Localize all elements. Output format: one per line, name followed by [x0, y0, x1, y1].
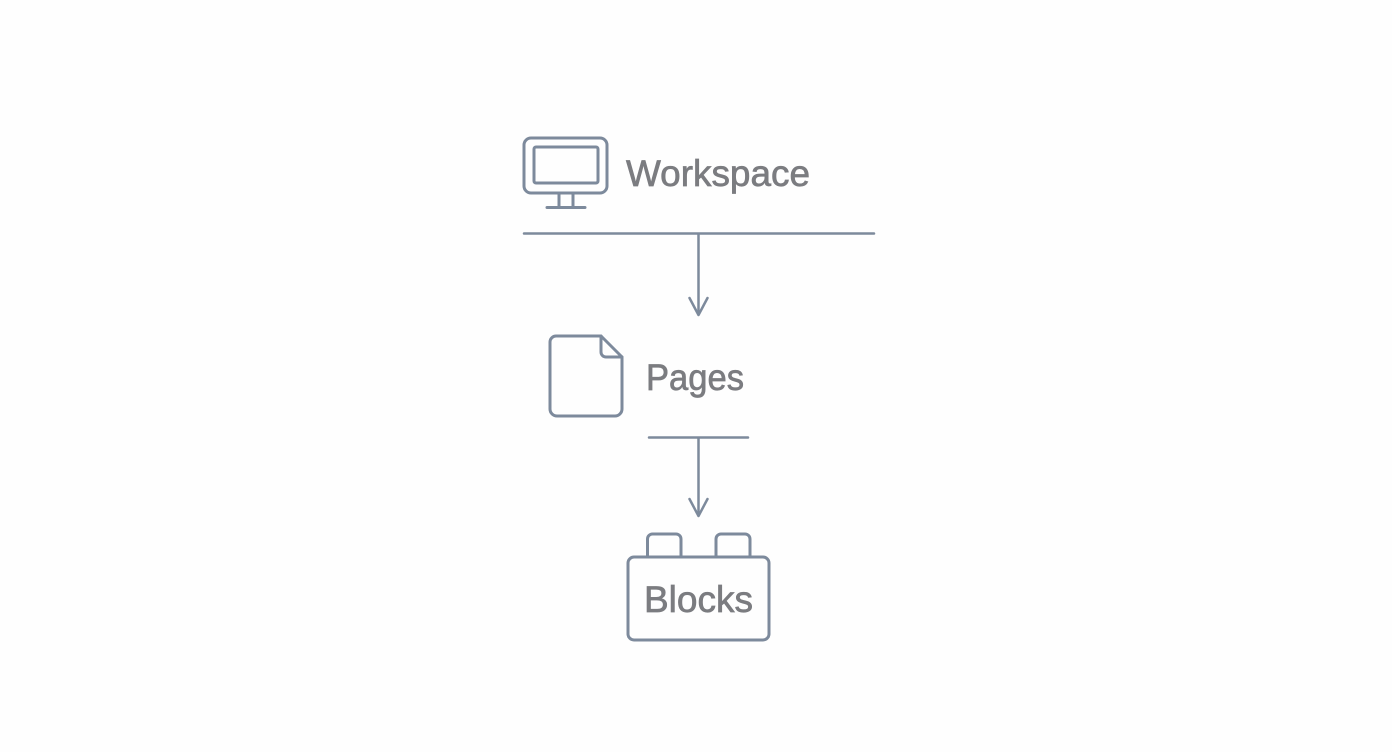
icon: page — [550, 336, 622, 416]
heading: Pages: Pages — [646, 356, 744, 398]
connector: pages to blocks — [649, 438, 748, 516]
connector: workspace to pages — [524, 234, 874, 315]
heading: Blocks: Blocks — [644, 578, 753, 620]
icon: building block — [628, 534, 769, 640]
icon: monitor — [524, 138, 607, 208]
heading: Workspace: Workspace — [626, 152, 810, 194]
